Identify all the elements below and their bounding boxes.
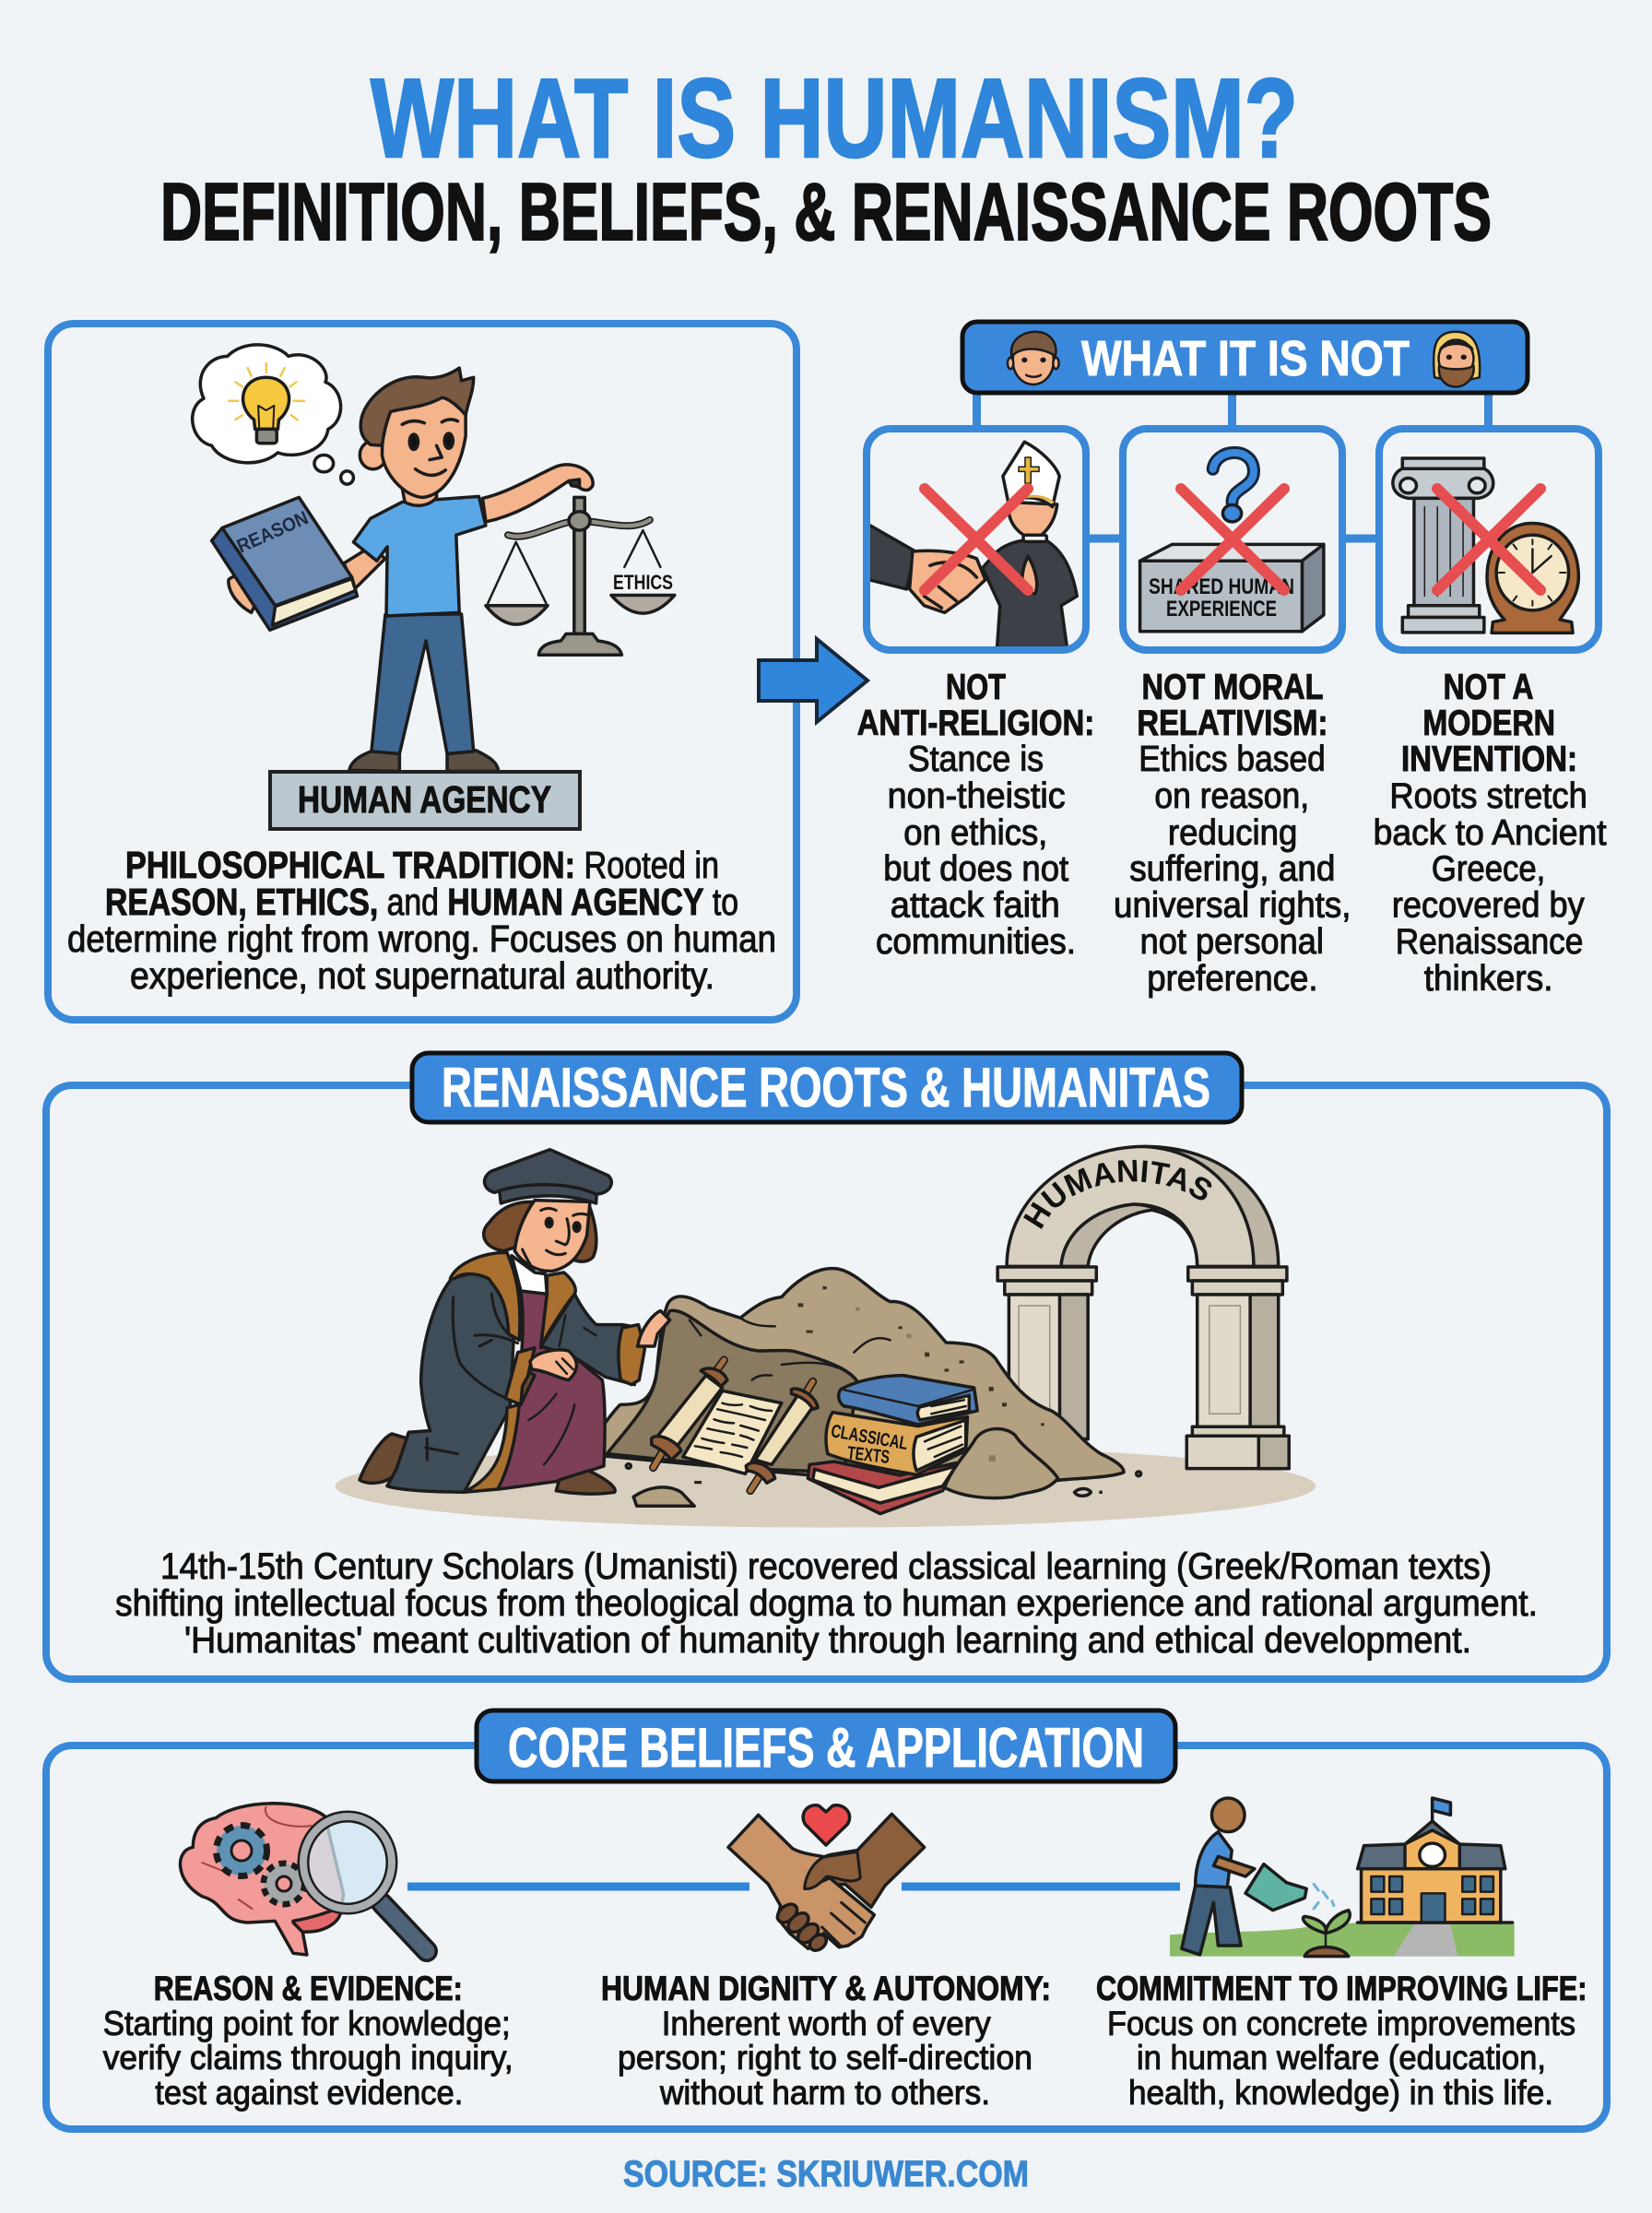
text: not anti-religion: non-theistic — [888, 776, 1066, 816]
text: not moral relativism: universal rights, — [1114, 885, 1351, 926]
illustration: person with book and scales — [193, 345, 675, 771]
text: human dignity and autonomy: person; right to self-direction — [618, 2039, 1032, 2077]
text: not anti-religion: communities. — [876, 922, 1076, 962]
text: not moral relativism: NOT MORAL — [1141, 668, 1324, 707]
icon: blue gear — [217, 1826, 266, 1876]
text: not moral relativism: suffering, and — [1129, 849, 1335, 889]
heading: core beliefs and application: CORE BELIEFS & APPLICATION — [508, 1717, 1144, 1779]
text: not a modern invention: thinkers. — [1424, 959, 1552, 999]
text: not a modern invention: Renaissance — [1396, 922, 1583, 962]
text: not a modern invention — [1374, 668, 1607, 999]
text: commitment to improving life — [1096, 1970, 1587, 2112]
text: not anti-religion: on ethics, — [903, 813, 1047, 853]
text: not moral relativism: preference. — [1147, 959, 1318, 999]
text: not a modern invention: INVENTION: — [1401, 740, 1577, 779]
text: not moral relativism: not personal — [1140, 922, 1324, 962]
text: not a modern invention: NOT A — [1444, 668, 1534, 707]
icon: gardener and school — [1170, 1798, 1515, 1957]
text: not moral relativism: Ethics based — [1139, 740, 1326, 779]
text block: definition: determine right from wrong. Focuses on human — [67, 917, 776, 960]
text block: renaissance description: 'Humanitas' meant cultivation of humanity through learning and ethical development. — [184, 1620, 1471, 1661]
text: not anti-religion: Stance is — [908, 740, 1044, 779]
scroll — [683, 1391, 782, 1473]
text: not anti-religion: but does not — [883, 849, 1068, 889]
connectors — [407, 1883, 1180, 1890]
illustration: arch and ground — [336, 1146, 1316, 1528]
text: human dignity and autonomy: without harm to others. — [659, 2074, 990, 2112]
text: not moral relativism — [1114, 668, 1351, 999]
text: not moral relativism: reducing — [1168, 813, 1297, 853]
icon: brain with gears and magnifier — [181, 1804, 427, 1955]
icon: magnifier — [303, 1817, 427, 1951]
arrow: to what it is not — [759, 639, 867, 722]
label: ethics on scale: ETHICS — [613, 571, 673, 594]
plaque: human agency: HUMAN AGENCY — [298, 778, 551, 821]
text: not a modern invention: Greece, — [1432, 849, 1545, 889]
label: reason on book: REASON — [234, 507, 312, 558]
illustration: mound, scroll and books — [581, 1269, 1141, 1514]
panel: core beliefs — [46, 1710, 1607, 2129]
text: reason and evidence: test against evidence. — [155, 2074, 463, 2112]
text: human dignity and autonomy: Inherent worth of every — [662, 2005, 991, 2042]
text block: definition: PHILOSOPHICAL TRADITION: Rooted in — [125, 844, 719, 886]
card: not moral relativism icon — [1123, 429, 1342, 650]
icon: handshake with heart — [728, 1805, 925, 1954]
text: commitment to improving life: in human welfare (education, — [1137, 2039, 1546, 2077]
icon: two faces — [1008, 332, 1480, 386]
heading: what it is not: WHAT IT IS NOT — [1081, 331, 1410, 386]
plaque: human agency — [270, 772, 580, 829]
source: SOURCE: SKRIUWER.COM — [623, 2154, 1029, 2195]
text block: renaissance description: shifting intellectual focus from theological dogma to human experience and rational argument. — [115, 1583, 1538, 1624]
text block: definition: experience, not supernatural authority. — [130, 954, 714, 997]
label: classical texts: TEXTS — [846, 1443, 891, 1468]
text: reason and evidence: Starting point for knowledge; — [103, 2005, 511, 2042]
text: human dignity and autonomy — [601, 1970, 1051, 2112]
text: reason and evidence — [103, 1970, 513, 2112]
text: commitment to improving life: Focus on concrete improvements — [1107, 2005, 1575, 2042]
text: not anti-religion — [857, 668, 1094, 962]
red book — [808, 1462, 956, 1514]
label: classical texts: CLASSICAL — [830, 1421, 909, 1454]
text: not anti-religion: attack faith — [891, 885, 1060, 926]
text: not a modern invention: Roots stretch — [1389, 776, 1587, 816]
small pile — [945, 1429, 1058, 1498]
text: not a modern invention: back to Ancient — [1374, 813, 1607, 853]
text: not anti-religion: NOT — [946, 668, 1006, 707]
label: humanitas: HUMANITAS — [1023, 1160, 1211, 1229]
text: commitment to improving life: health, knowledge) in this life. — [1128, 2074, 1553, 2112]
card: not moral relativism icon: EXPERIENCE — [1166, 597, 1277, 621]
text: reason and evidence: verify claims through inquiry, — [103, 2039, 513, 2077]
card: not anti-religion icon — [867, 429, 1086, 650]
illustration: kneeling scholar — [360, 1150, 670, 1494]
text: reason and evidence: REASON & EVIDENCE: — [154, 1970, 463, 2007]
text block: renaissance description: 14th-15th Century Scholars (Umanisti) recovered classical learning (Greek/Roman texts) — [160, 1546, 1492, 1587]
icon: grey gear — [264, 1864, 304, 1904]
text: not moral relativism: on reason, — [1154, 776, 1309, 816]
heading: core beliefs and application — [477, 1710, 1175, 1781]
text block: definition: REASON, ETHICS, and HUMAN AGENCY to — [105, 881, 738, 923]
label: classical texts — [830, 1421, 909, 1468]
heading: renaissance roots and humanitas: RENAISSANCE ROOTS & HUMANITAS — [442, 1057, 1210, 1118]
card: not moral relativism icon: SHARED HUMAN — [1149, 574, 1294, 599]
blue book — [839, 1376, 977, 1425]
title — [160, 55, 1492, 257]
title: WHAT IS HUMANISM? — [371, 55, 1298, 181]
panel: what it is not — [857, 322, 1607, 999]
heading: what it is not — [962, 322, 1528, 393]
text: not a modern invention: recovered by — [1392, 885, 1585, 926]
gold book — [826, 1413, 967, 1474]
panel: renaissance roots — [42, 1051, 1611, 1683]
card: not a modern invention icon — [1379, 429, 1599, 650]
text: human dignity and autonomy: HUMAN DIGNITY & AUTONOMY: — [601, 1970, 1051, 2007]
text block: definition — [67, 844, 776, 997]
text: not moral relativism: RELATIVISM: — [1137, 704, 1328, 743]
label: humanitas arch path — [1040, 1181, 1228, 1236]
panel: philosophical tradition — [48, 324, 796, 1020]
connectors — [977, 394, 1488, 538]
text: not a modern invention: MODERN — [1422, 704, 1555, 743]
text: not anti-religion: ANTI-RELIGION: — [857, 704, 1094, 743]
text block: renaissance description — [115, 1546, 1538, 1661]
